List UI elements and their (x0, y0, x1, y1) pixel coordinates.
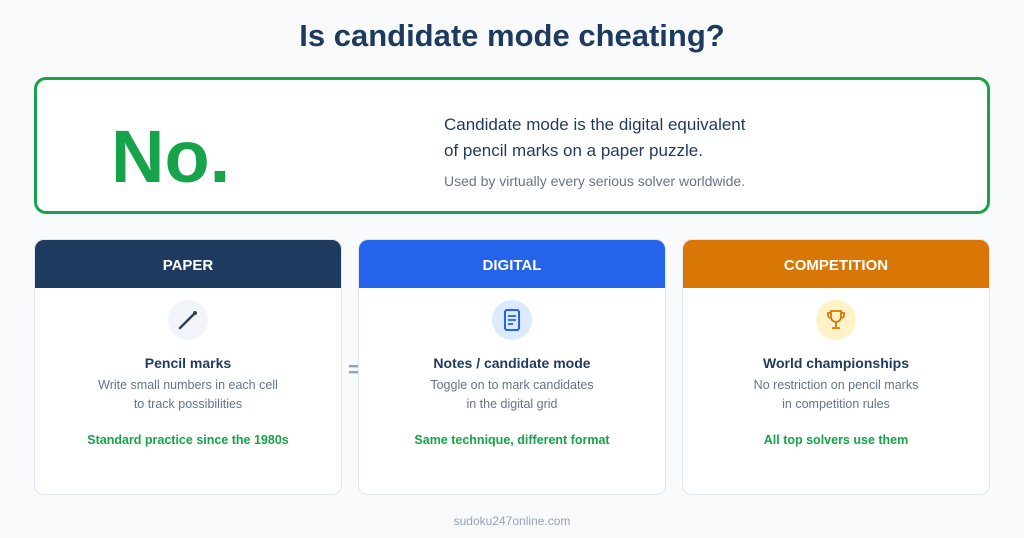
text: Toggle on to mark candidates (430, 378, 594, 392)
text: in competition rules (782, 397, 890, 411)
icon: note (492, 300, 532, 340)
green note: All top solvers use them (764, 433, 908, 447)
description: Candidate mode is the digital equivalent (444, 115, 745, 134)
title: Is candidate mode cheating? (299, 18, 725, 53)
header competition: COMPETITION (784, 257, 888, 274)
text (754, 378, 918, 411)
header competition (683, 240, 989, 288)
header paper (35, 240, 341, 288)
heading: World championships (763, 355, 909, 371)
panel: competition (682, 239, 990, 495)
panel: paper (34, 239, 342, 495)
footer: sudoku247online.com (454, 514, 570, 528)
heading: Notes / candidate mode (433, 355, 591, 371)
text (430, 378, 594, 411)
header paper: PAPER (163, 257, 213, 274)
description: of pencil marks on a paper puzzle. (444, 141, 703, 160)
text: to track possibilities (134, 397, 242, 411)
big No: No. (111, 115, 230, 198)
icon: pencil (168, 300, 208, 340)
header digital: DIGITAL (483, 257, 541, 274)
header digital (359, 240, 665, 288)
green note: Same technique, different format (414, 433, 610, 447)
heading: Pencil marks (145, 355, 231, 371)
equals sign: = (348, 357, 361, 382)
text (98, 378, 278, 411)
panel: digital (358, 239, 666, 495)
icon: trophy (816, 300, 856, 340)
text: No restriction on pencil marks (754, 378, 918, 392)
text: Write small numbers in each cell (98, 378, 278, 392)
subtext: Used by virtually every serious solver worldwide. (444, 173, 745, 189)
green note: Standard practice since the 1980s (87, 433, 289, 447)
description (444, 115, 746, 160)
panel: answer (34, 77, 990, 214)
text: in the digital grid (466, 397, 558, 411)
